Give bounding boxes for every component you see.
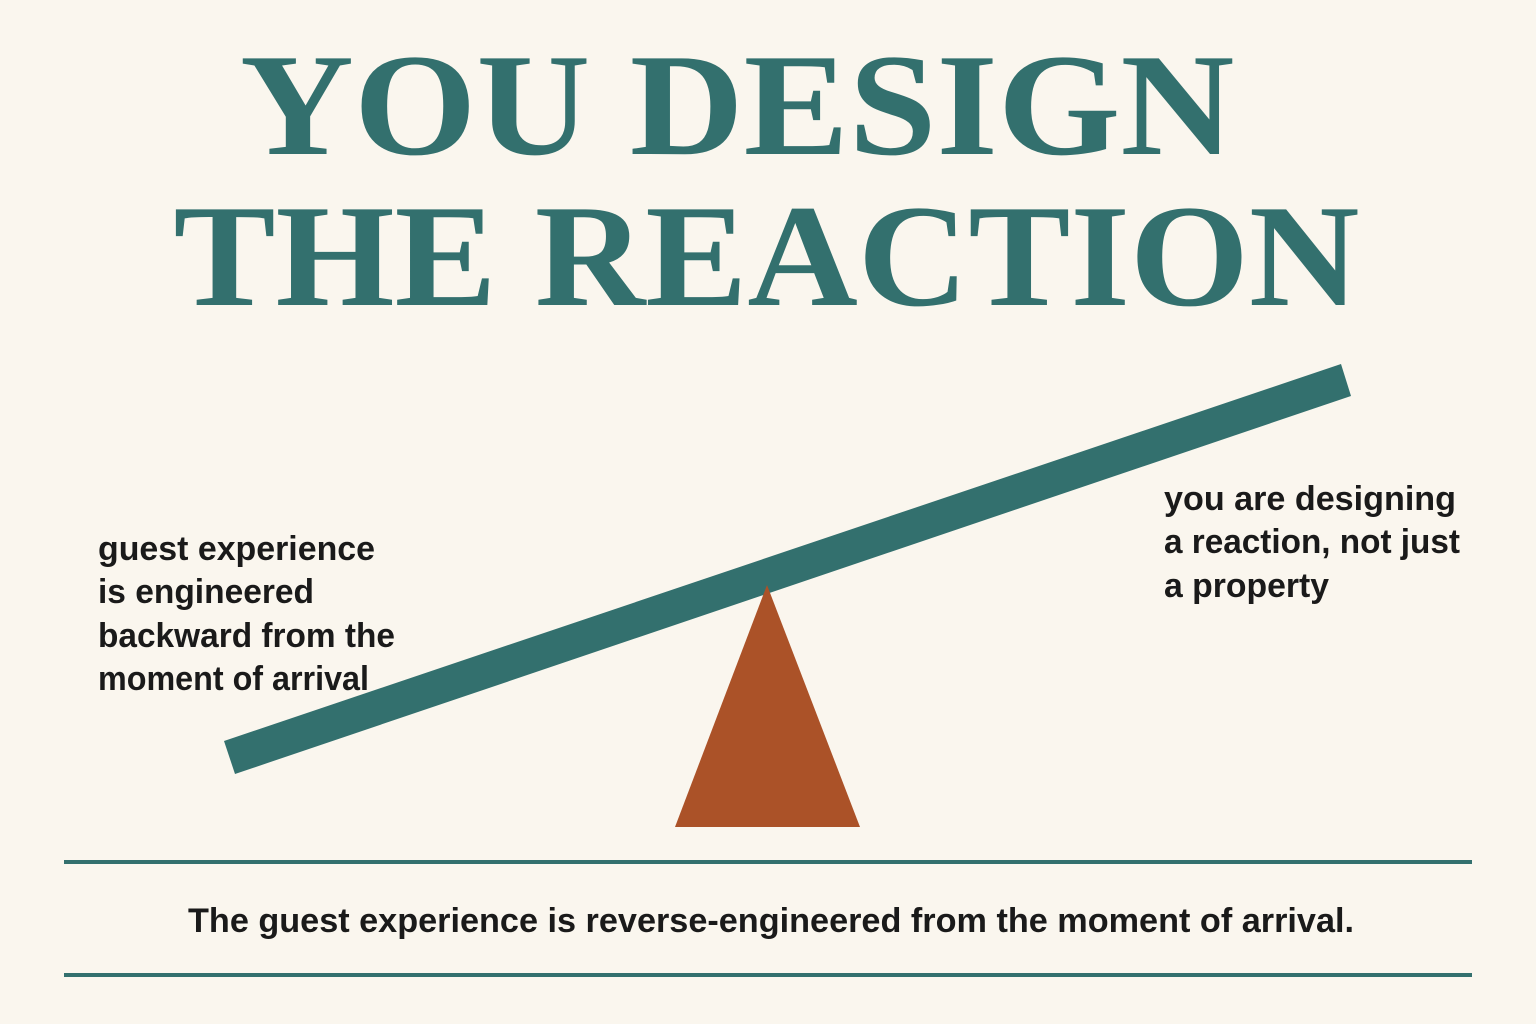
left text block: moment of arrival	[98, 660, 369, 698]
left text block: guest experience	[98, 530, 375, 568]
right text block: a reaction, not just	[1164, 523, 1460, 561]
seesaw beam	[224, 364, 1351, 774]
right text block: you are designing	[1164, 480, 1456, 518]
fulcrum triangle	[675, 585, 860, 827]
footer statement: The guest experience is reverse-engineered from the moment of arrival.	[188, 902, 1354, 940]
seesaw diagram	[224, 364, 1351, 827]
right text block: a property	[1164, 567, 1329, 605]
left text block: is engineered	[98, 573, 314, 611]
right text block	[1164, 480, 1460, 605]
title: THE REACTION	[174, 176, 1359, 337]
title	[174, 24, 1359, 337]
left text block	[98, 530, 395, 698]
left text block: backward from the	[98, 617, 395, 655]
title: YOU DESIGN	[240, 24, 1234, 186]
